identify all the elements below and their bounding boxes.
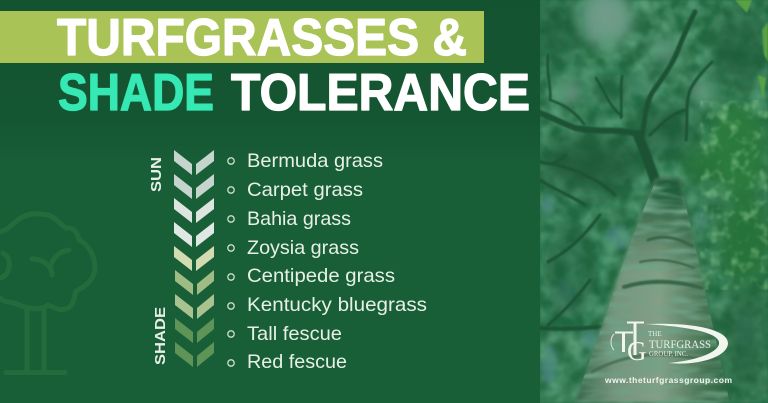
title line 2: tolerance: TOLERANCE [231,64,530,122]
grass list: Zoysia grass [247,237,359,259]
dark canopy masses [535,0,768,400]
lower sky gaps [541,195,754,385]
branches [540,12,712,329]
title line 1: TURFGRASSES & [57,9,467,67]
logo wordmark: THE [648,330,662,338]
trunk top shading [626,176,696,264]
list items: Bermuda grass [247,150,383,172]
panel: tree photo [535,0,768,403]
label: shade: SHADE [152,307,169,365]
letter T back [627,322,644,355]
title [57,9,530,122]
trunk [574,178,730,403]
trunk bark texture [570,175,735,403]
bright foliage [682,104,768,286]
title line 2: shade: SHADE [58,64,214,122]
grass list: Carpet grass [247,179,363,201]
grass list: Tall fescue [247,323,342,345]
icon: tree outline [0,214,95,372]
letter C outline [611,334,614,350]
logo wordmark [648,330,711,358]
title highlight bar [0,11,484,63]
corner leaves [735,0,768,100]
grass list: Red fescue [247,351,347,373]
letter T front [615,332,633,352]
letter G: G [627,336,646,366]
label: sun: SUN [148,157,165,192]
website url: www.theturfgrassgroup.com [604,375,732,385]
logo swoosh [645,324,728,364]
grass list [228,150,427,373]
grass list: Centipede grass [247,265,395,287]
logo wordmark: TURFGRASS [649,337,711,351]
chevron scale from sun to shade [174,150,214,367]
grass list: Kentucky bluegrass [247,294,427,316]
sky haze over the foliage [585,0,625,36]
foliage shading [540,0,768,403]
sky patches [556,0,714,106]
bullets [228,158,234,366]
trunk bark marks [592,237,704,372]
bright leaf texture [700,100,768,290]
grass list: Bahia grass [247,208,351,230]
logo: The Turfgrass Group [604,322,732,385]
background panel [0,0,540,403]
logo wordmark: GROUP, INC. [649,350,688,358]
